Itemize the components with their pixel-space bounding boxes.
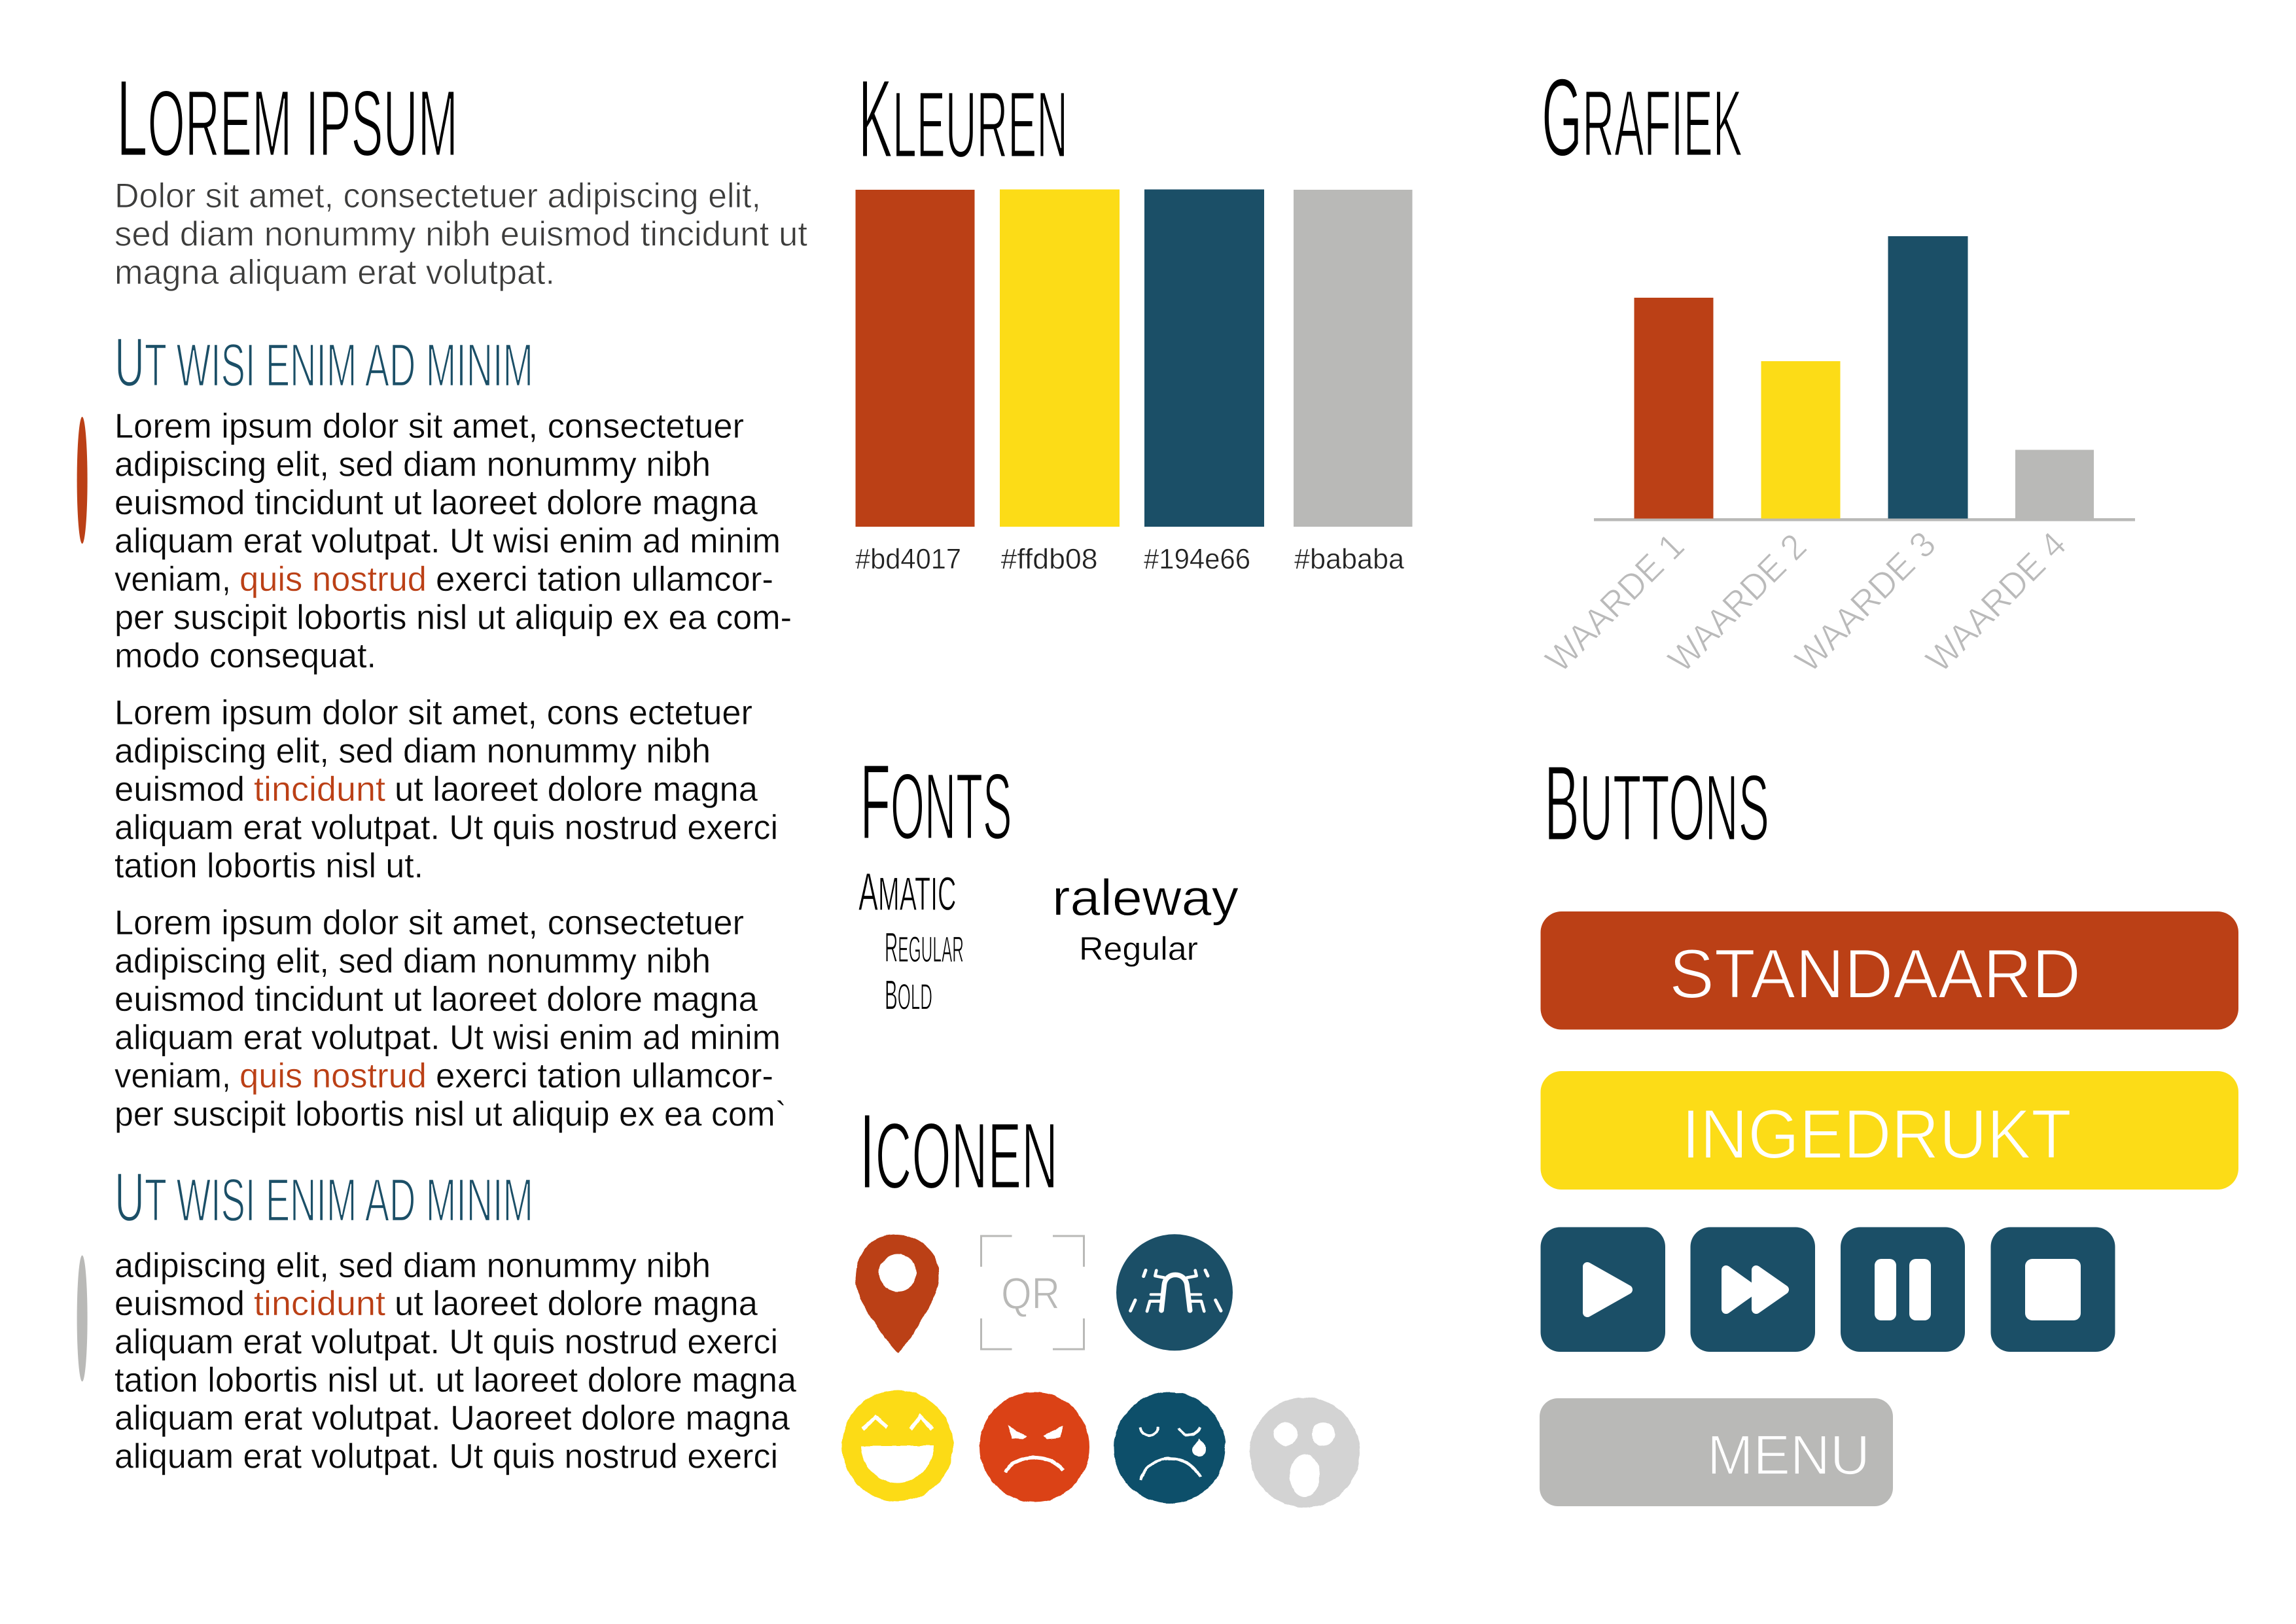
hex label: yellow: #ffdb08 — [1001, 543, 1098, 575]
paragraph 4: tation lobortis nisl ut. ut laoreet dolore magna — [115, 1361, 797, 1400]
paragraph 4: tincidunt — [254, 1284, 385, 1323]
icon: happy face — [841, 1390, 953, 1501]
icon: qr code — [981, 1236, 1084, 1349]
heading: ut wisi enim ad minim 2: UT WISI ENIM AD MINIM — [115, 1159, 533, 1236]
paragraph 3 — [115, 904, 786, 1133]
heading: iconen: ICONEN — [859, 1091, 1058, 1211]
paragraph 3: Lorem ipsum dolor sit amet, consectetuer — [115, 904, 744, 942]
paragraph 1: per suscipit lobortis nisl ut aliquip ex ea com- — [115, 598, 792, 637]
font sample: raleway: raleway — [1052, 869, 1239, 927]
paragraph 4 — [115, 1246, 797, 1476]
bar: waarde 3 — [1888, 236, 1968, 518]
button: ingedrukt — [1540, 1071, 2238, 1190]
paragraph 1: modo consequat. — [115, 637, 376, 675]
button: ingedrukt: INGEDRUKT — [1682, 1095, 2072, 1173]
icon: shocked face — [1250, 1398, 1360, 1508]
icon: road — [1116, 1234, 1233, 1350]
font sample: amatic: BOLD — [885, 971, 932, 1018]
bar: waarde 2 — [1761, 361, 1840, 518]
button: fast forward — [1691, 1227, 1815, 1352]
icon: qr code: QR — [1001, 1269, 1060, 1318]
heading: buttons: BUTTONS — [1544, 743, 1769, 863]
paragraph 1: aliquam erat volutpat. Ut wisi enim ad minim — [115, 522, 781, 560]
intro text: magna aliquam erat volutpat. — [115, 253, 555, 292]
paragraph 3: exerci tation ullamcor- — [436, 1057, 773, 1095]
bar: waarde 1 — [1634, 298, 1713, 518]
title: LOREM IPSUM — [116, 58, 458, 179]
paragraph 2: Lorem ipsum dolor sit amet, cons ectetuer — [115, 694, 752, 732]
paragraph 3: aliquam erat volutpat. Ut wisi enim ad minim — [115, 1018, 781, 1057]
paragraph 4: adipiscing elit, sed diam nonummy nibh — [115, 1246, 711, 1285]
heading: ut wisi enim ad minim: UT WISI ENIM AD MINIM — [115, 324, 533, 401]
heading: grafiek: GRAFIEK — [1542, 56, 1742, 180]
hex label: gray: #bababa — [1294, 543, 1405, 575]
paragraph 2: ut laoreet dolore magna — [395, 770, 758, 809]
icon: sad face — [1114, 1392, 1225, 1504]
paragraph 4: ut laoreet dolore magna — [395, 1284, 758, 1323]
heading: fonts: FONTS — [860, 742, 1012, 862]
font sample: raleway: Regular — [1079, 930, 1198, 967]
paragraph 1: Lorem ipsum dolor sit amet, consectetuer — [115, 407, 744, 446]
button: menu: MENU — [1707, 1424, 1870, 1487]
paragraph 1: exerci tation ullamcor- — [436, 560, 773, 599]
paragraph 4: aliquam erat volutpat. Ut quis nostrud exerci — [115, 1437, 778, 1476]
paragraph 4: aliquam erat volutpat. Ut quis nostrud exerci — [115, 1323, 778, 1361]
paragraph 2: adipiscing elit, sed diam nonummy nibh — [115, 732, 711, 771]
font sample: amatic: AMATIC — [858, 862, 957, 922]
paragraph 2 — [115, 694, 778, 885]
paragraph 3: euismod tincidunt ut laoreet dolore magna — [115, 980, 758, 1019]
paragraph 1: quis nostrud — [239, 560, 427, 599]
paragraph 2: aliquam erat volutpat. Ut quis nostrud exerci — [115, 809, 778, 847]
paragraph 1 — [115, 407, 792, 675]
panel: colour swatches — [855, 190, 1412, 575]
button: standaard — [1540, 911, 2238, 1030]
font sample: amatic — [858, 862, 964, 1018]
icon: angry face — [980, 1392, 1089, 1502]
paragraph 1: veniam, — [115, 560, 231, 599]
paragraph 2: tincidunt — [254, 770, 385, 809]
paragraph 4: aliquam erat volutpat. Uaoreet dolore magna — [115, 1399, 790, 1438]
axis — [1594, 518, 2135, 521]
axis label 4: WAARDE 4 — [1918, 524, 2074, 680]
intro text — [115, 177, 807, 292]
paragraph 1: euismod tincidunt ut laoreet dolore magna — [115, 484, 758, 522]
bar: waarde 4 — [2015, 450, 2094, 518]
button: stop — [1990, 1227, 2115, 1352]
paragraph 2: tation lobortis nisl ut. — [115, 847, 423, 885]
paragraph 4: euismod — [115, 1284, 245, 1323]
paragraph 3: veniam, — [115, 1057, 231, 1095]
font sample: raleway — [1052, 869, 1239, 967]
button: play — [1540, 1227, 1665, 1352]
paragraph 3: quis nostrud — [239, 1057, 427, 1095]
heading: kleuren: KLEUREN — [858, 57, 1068, 181]
intro text: sed diam nonummy nibh euismod tincidunt ut — [115, 215, 807, 254]
marker: red — [77, 417, 88, 544]
button: standaard: STANDAARD — [1669, 934, 2081, 1013]
axis label 3: WAARDE 3 — [1787, 523, 1943, 680]
swatch: yellow — [1000, 190, 1120, 527]
button: pause — [1841, 1227, 1965, 1352]
marker: gray — [77, 1255, 88, 1382]
swatch: gray — [1294, 190, 1412, 527]
axis label 1: WAARDE 1 — [1538, 525, 1692, 680]
swatch: red — [856, 190, 975, 527]
paragraph 3: per suscipit lobortis nisl ut aliquip ex ea com` — [115, 1095, 786, 1133]
icon: location pin — [856, 1235, 939, 1353]
swatch: blue — [1144, 190, 1264, 527]
button: menu — [1540, 1398, 1893, 1506]
paragraph 2: euismod — [115, 770, 245, 809]
bar chart — [1538, 236, 2135, 680]
paragraph 1: adipiscing elit, sed diam nonummy nibh — [115, 445, 711, 484]
hex label: blue: #194e66 — [1144, 543, 1250, 575]
paragraph 3: adipiscing elit, sed diam nonummy nibh — [115, 942, 711, 980]
hex label: red: #bd4017 — [855, 543, 961, 575]
text: REGULAR — [885, 924, 964, 971]
intro text: Dolor sit amet, consectetuer adipiscing elit, — [115, 177, 761, 215]
axis label 2: WAARDE 2 — [1660, 526, 1814, 680]
